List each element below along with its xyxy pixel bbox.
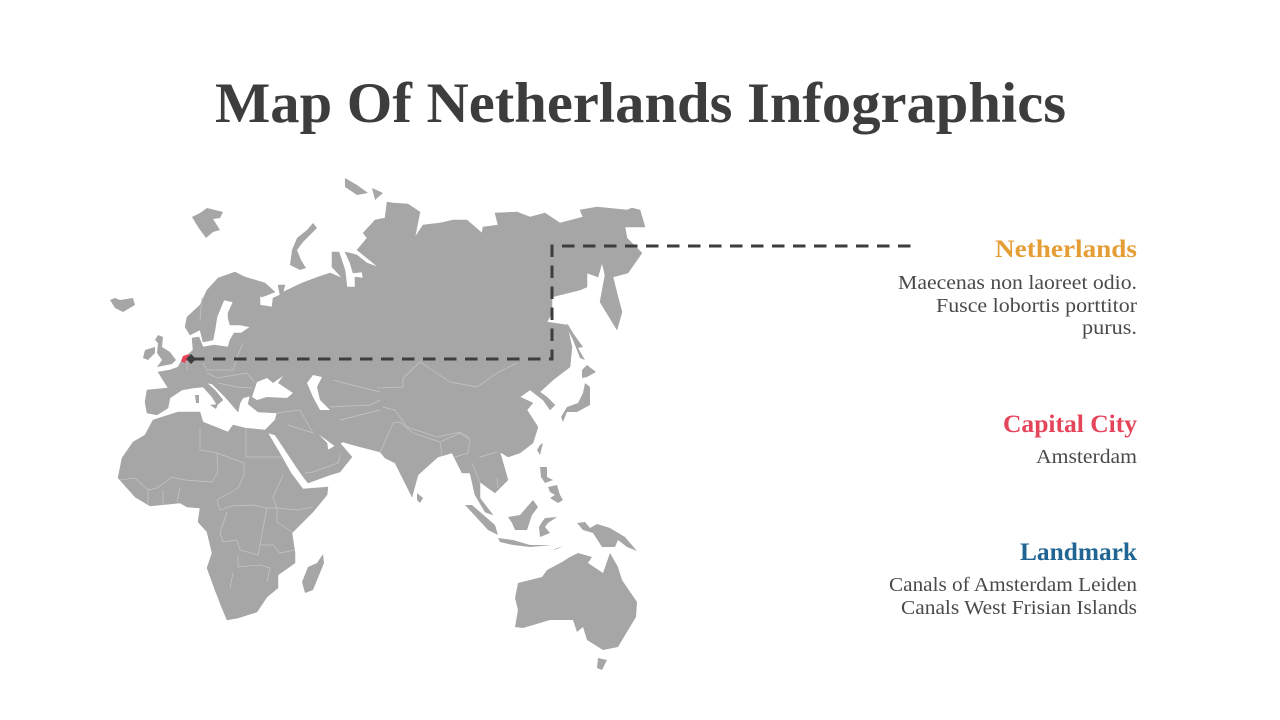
world map [110, 178, 645, 670]
connector endpoint diamond [186, 354, 196, 364]
heading: Capital City: Capital City [1003, 411, 1138, 438]
description: Netherlands: Fusce lobortis porttitor [936, 295, 1137, 317]
description: Netherlands [898, 272, 1137, 339]
description: Landmark: Canals West Frisian Islands [901, 597, 1137, 619]
dashed connector from Netherlands to heading [192, 246, 912, 359]
landmass: Eurasia and Africa [118, 202, 645, 620]
heading: Netherlands: Netherlands [995, 236, 1137, 263]
highlighted region: Netherlands [181, 354, 190, 363]
islands [110, 178, 637, 670]
Caspian Sea [307, 375, 330, 410]
heading: Landmark: Landmark [1020, 539, 1137, 566]
block: Netherlands [898, 236, 1137, 339]
description: Landmark: Canals of Amsterdam Leiden [889, 574, 1137, 596]
block: Capital City [1003, 411, 1138, 468]
description: Netherlands: purus. [1082, 317, 1137, 339]
Black Sea [252, 376, 293, 400]
description: Netherlands: Maecenas non laoreet odio. [898, 272, 1137, 294]
description: Landmark [889, 574, 1137, 619]
country borders [120, 297, 517, 588]
description: Capital City: Amsterdam [1036, 446, 1137, 468]
block: Landmark [889, 539, 1137, 619]
title: Map Of Netherlands Infographics [215, 72, 1066, 135]
